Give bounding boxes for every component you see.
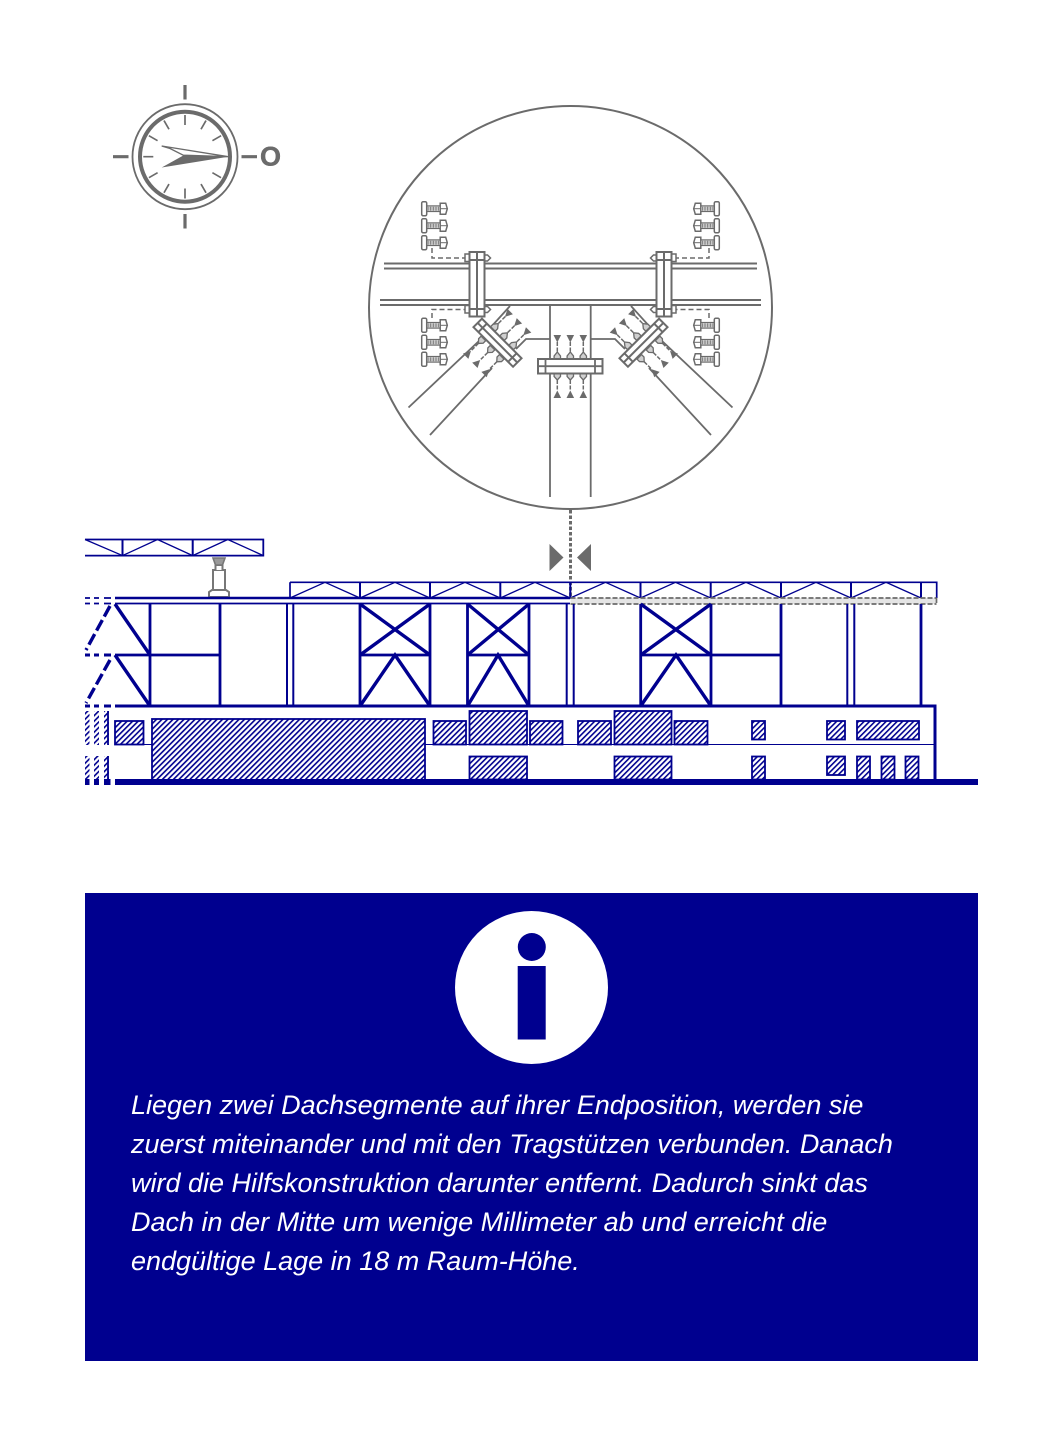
connecting dashed leaders	[432, 248, 709, 318]
mid floor line	[143, 744, 935, 746]
right diagonal strut	[591, 306, 732, 435]
detail circle: bolted roof joint	[369, 106, 772, 509]
loose bolts, upper left	[422, 202, 447, 250]
cut-off left edge hatching	[85, 711, 109, 780]
info text	[130, 1090, 893, 1276]
loose bolts, lower right	[694, 318, 719, 366]
compass letter O: O	[260, 142, 281, 172]
icon: compass pointing east	[113, 85, 281, 228]
hatched sectioned rooms	[115, 711, 919, 780]
left diagonal strut	[408, 306, 550, 435]
ground line	[85, 779, 978, 785]
central column with plate	[538, 306, 602, 497]
info text: zuerst miteinander und mit den Tragstützen verbunden. Danach	[130, 1129, 893, 1159]
steel frame columns and bracing	[85, 604, 935, 780]
dotted leader from detail circle to roof	[569, 510, 572, 598]
info text: endgültige Lage in 18 m Raum-Höhe.	[131, 1246, 580, 1276]
roof chords	[85, 598, 570, 604]
roof beams	[380, 264, 761, 305]
raised roof segment truss	[85, 540, 263, 556]
dashed final roof position	[570, 598, 936, 604]
installed roof trusses	[290, 582, 937, 598]
arrow: right marker	[577, 544, 591, 571]
panel: info box	[85, 893, 978, 1361]
loose bolts, lower left	[422, 318, 447, 366]
hydraulic jack	[209, 558, 229, 597]
info text: Dach in der Mitte um wenige Millimeter ab und erreicht die	[131, 1207, 827, 1237]
upper beam splice plates	[465, 252, 676, 316]
arrow: left marker	[550, 544, 564, 571]
info text: Liegen zwei Dachsegmente auf ihrer Endposition, werden sie	[131, 1090, 863, 1120]
info text: wird die Hilfskonstruktion darunter entfernt. Dadurch sinkt das	[131, 1168, 868, 1198]
icon: info	[455, 911, 608, 1064]
loose bolts, upper right	[694, 202, 719, 250]
